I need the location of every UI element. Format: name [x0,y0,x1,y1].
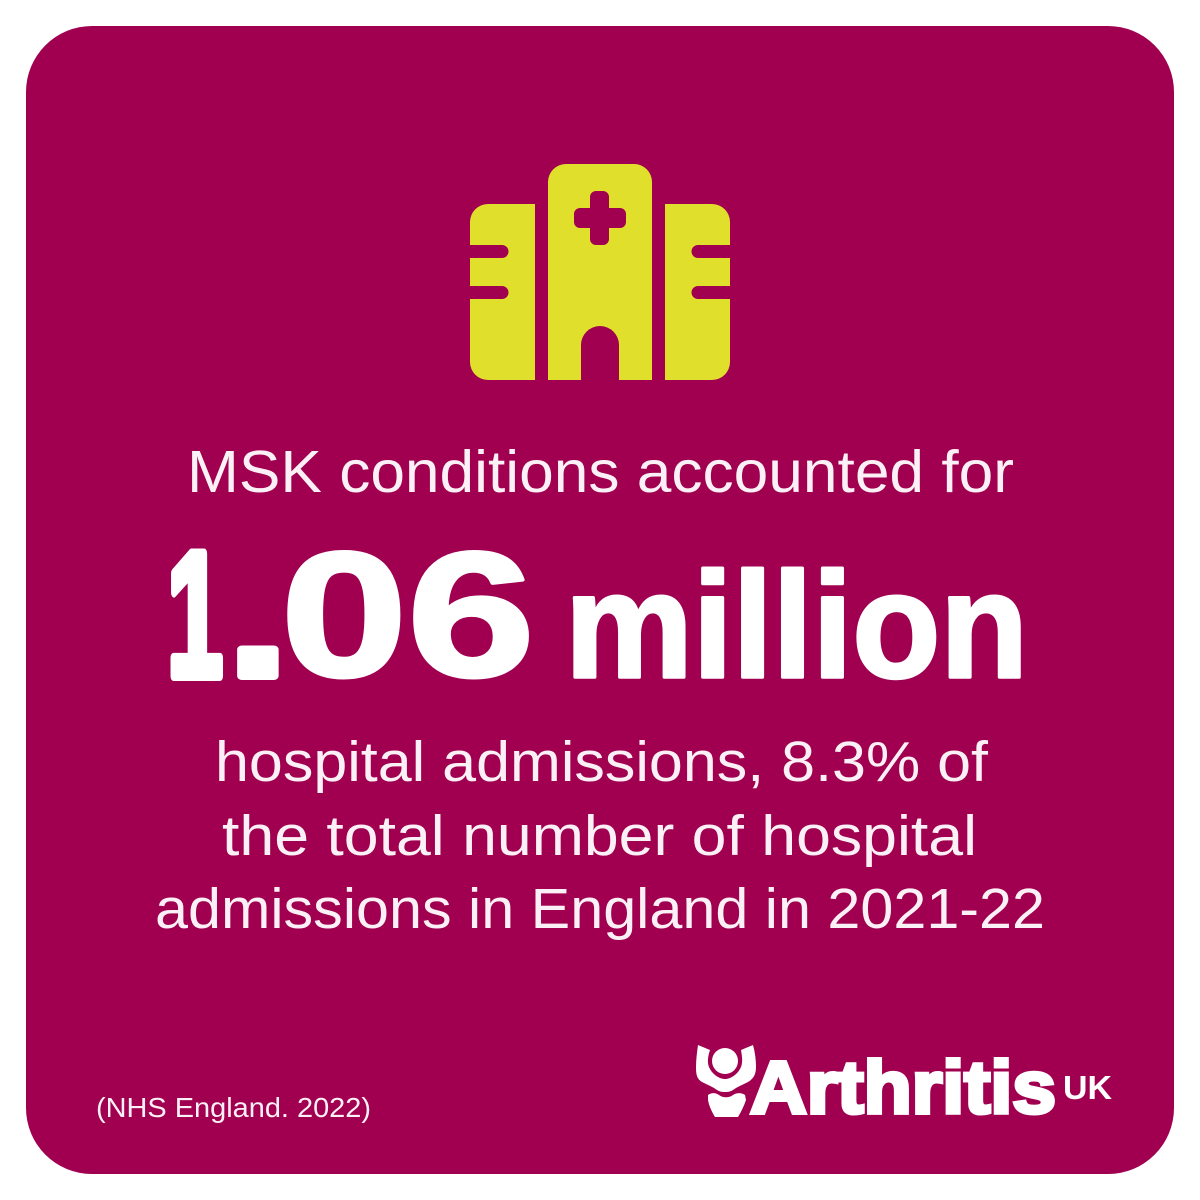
headline statistic: 1 [167,515,223,714]
headline statistic [167,515,1028,714]
icon: figure with raised arms [696,1045,756,1117]
text block: description: hospital admissions, 8.3% of [215,730,988,794]
headline statistic: million [565,541,1028,709]
headline statistic: 0 [280,515,408,714]
logo suffix: UK [1063,1069,1112,1106]
text block: description: the total number of hospital [222,804,977,868]
text block: description [155,730,1045,941]
logo wordmark: Arthritis [750,1046,1056,1129]
heading: intro line: MSK conditions accounted for [187,439,1014,505]
logo: Arthritis UK [696,1045,1112,1129]
headline statistic: . [227,515,289,714]
icon: hospital building [470,164,730,380]
headline statistic: 6 [407,515,535,714]
text block: description: admissions in England in 2021-22 [155,877,1045,941]
source citation: (NHS England. 2022) [96,1092,371,1123]
